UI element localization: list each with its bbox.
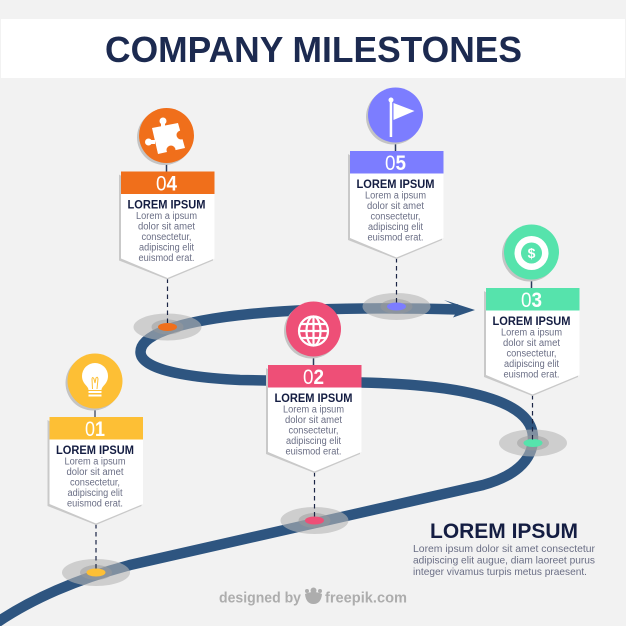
milestone 05: Lorem a ipsum <box>365 190 426 202</box>
milestone 02: 02 <box>303 366 324 389</box>
milestone 01 <box>48 354 143 572</box>
marker 03 <box>499 430 567 456</box>
milestone 03: euismod erat. <box>504 370 560 380</box>
milestone 01: Lorem a ipsum <box>64 456 126 468</box>
milestone 05: euismod erat. <box>368 232 424 244</box>
milestone 02: consectetur, <box>288 426 338 436</box>
milestone 02 <box>266 302 362 520</box>
icon: globe <box>299 316 328 346</box>
milestone 04: 04 <box>156 172 177 196</box>
milestone 03: 03 <box>521 289 542 312</box>
icon: flag <box>388 98 414 137</box>
milestone 03: consectetur, <box>506 348 556 360</box>
milestone 01: dolor sit amet <box>66 467 124 478</box>
milestone 05 <box>348 88 444 306</box>
bottom heading: LOREM IPSUM <box>430 520 578 543</box>
milestone 05: adipiscing elit <box>368 222 423 233</box>
milestone 04: Lorem a ipsum <box>136 211 197 222</box>
milestone 03: LOREM IPSUM <box>492 316 570 328</box>
milestone 01: 01 <box>85 418 105 441</box>
bottom paragraph: integer vivamus turpis metus praesent. <box>413 566 587 578</box>
watermark <box>219 588 407 606</box>
milestone 02: dolor sit amet <box>285 415 342 426</box>
milestone 03 <box>484 224 580 443</box>
icon: dollar coin <box>514 236 548 270</box>
milestone 04: euismod erat. <box>138 253 194 264</box>
winding road arrow <box>0 300 533 626</box>
milestone 05: consectetur, <box>370 212 420 222</box>
milestone 01: euismod erat. <box>67 498 123 510</box>
milestone 04: dolor sit amet <box>138 222 195 232</box>
title: COMPANY MILESTONES <box>105 29 522 70</box>
milestone 04: consectetur, <box>142 232 192 243</box>
icon: puzzle piece <box>145 118 186 154</box>
title band <box>1 19 625 78</box>
milestone 03: dolor sit amet <box>503 338 560 349</box>
milestone 03: adipiscing elit <box>504 359 559 370</box>
bottom paragraph <box>413 543 595 578</box>
milestone 01: consectetur, <box>70 478 120 488</box>
bottom paragraph: Lorem ipsum dolor sit amet consectetur <box>413 543 595 555</box>
milestone 05: LOREM IPSUM <box>356 179 434 191</box>
milestone 05: dolor sit amet <box>367 201 424 212</box>
milestone 04 <box>119 108 214 326</box>
milestone 04: LOREM IPSUM <box>128 200 206 212</box>
marker 04 <box>134 314 202 340</box>
milestone 02: Lorem a ipsum <box>283 404 344 416</box>
milestone 02: adipiscing elit <box>286 436 341 447</box>
marker 02 <box>280 507 348 534</box>
milestone 01: adipiscing elit <box>68 488 123 499</box>
icon: freepik mascot <box>305 588 322 604</box>
watermark: designed by <box>219 590 302 606</box>
milestone 04: adipiscing elit <box>139 242 194 254</box>
bottom paragraph: adipiscing elit augue, diam laoreet purus <box>413 554 595 566</box>
icon: dollar coin: $ <box>528 245 536 261</box>
milestone 02: LOREM IPSUM <box>274 393 352 405</box>
milestone 01: LOREM IPSUM <box>56 445 134 457</box>
icon: light bulb <box>82 363 108 396</box>
marker 05 <box>362 293 430 320</box>
bottom text block <box>413 520 595 578</box>
milestone 05: 05 <box>385 152 406 175</box>
marker 01 <box>62 559 130 586</box>
milestone 03: Lorem a ipsum <box>501 328 562 338</box>
milestone 02: euismod erat. <box>286 446 342 458</box>
watermark: freepik.com <box>325 590 407 606</box>
